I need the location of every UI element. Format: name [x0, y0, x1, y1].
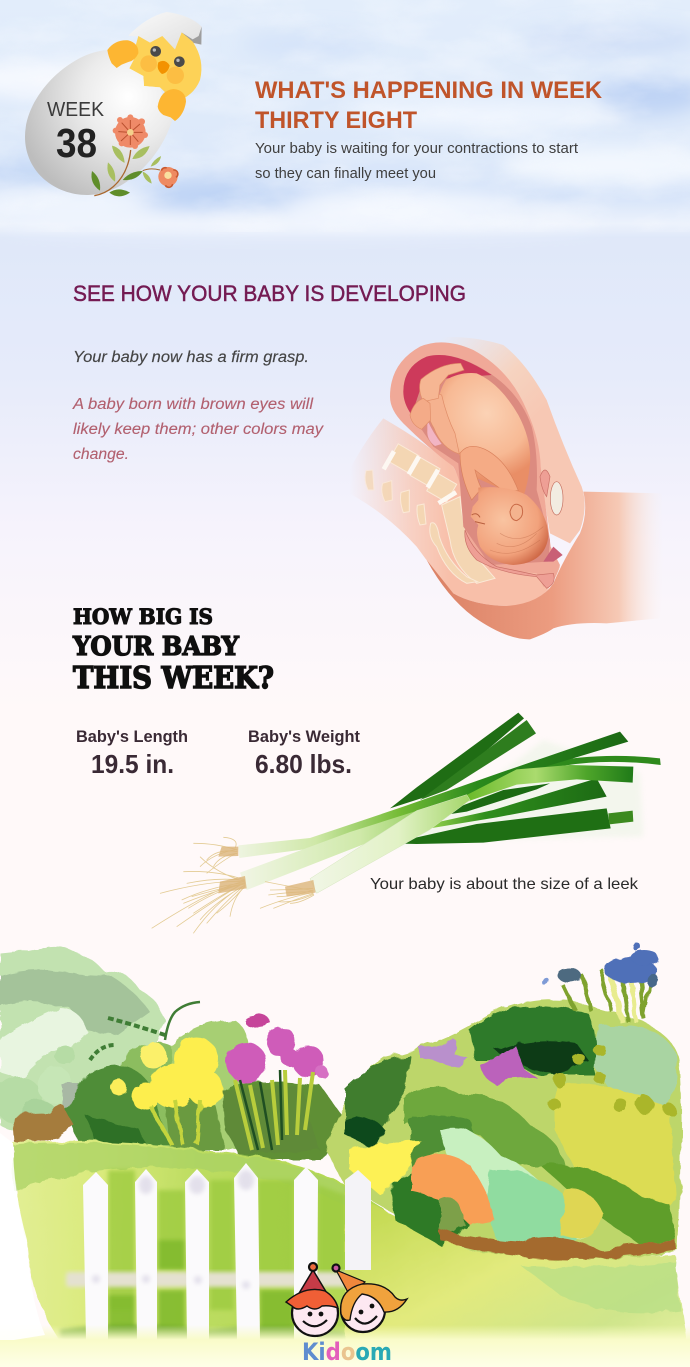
heading: how big is your baby	[72, 604, 274, 696]
uterus wall	[390, 342, 560, 587]
fetus legs and feet	[410, 363, 464, 454]
icon: chick wings	[107, 40, 186, 121]
eye colour fact: likely keep them; other colors may	[73, 421, 324, 438]
birth canal folds	[465, 470, 554, 588]
maternal back with spine	[340, 418, 560, 606]
illustration: watercolor garden	[0, 943, 690, 1367]
logo boy	[286, 1263, 338, 1336]
heading: what's happening: WHAT'S HAPPENING IN WEEK	[255, 77, 602, 104]
illustration: leek	[152, 713, 661, 933]
pink flowers	[222, 1015, 328, 1155]
leek caption: Your baby is about the size of a leek	[370, 876, 639, 893]
white left margin	[0, 1133, 45, 1340]
garden green bushes	[65, 1020, 345, 1160]
logo wordmark: Kidoom	[302, 1338, 392, 1366]
grass foot strip	[0, 1325, 690, 1367]
right picket	[345, 1170, 371, 1270]
heading: how big is your baby: YOUR BABY	[72, 632, 239, 662]
heading: what's happening: THIRTY EIGHT	[255, 107, 417, 134]
amniotic interior	[403, 355, 563, 565]
eye colour fact: A baby born with brown eyes will	[72, 396, 314, 413]
fetus arm	[460, 446, 518, 500]
stat: baby's weight: 6.80 lbs.	[255, 749, 352, 779]
heading: development: SEE HOW YOUR BABY IS DEVELOPING	[73, 281, 466, 306]
intro text: Your baby is waiting for your contractions to start	[255, 141, 578, 157]
maternal torso	[427, 492, 663, 639]
pale leek stalks	[238, 732, 633, 893]
purple flowers	[420, 1039, 538, 1084]
leek shadow	[337, 740, 643, 857]
logo girl	[332, 1264, 407, 1332]
eye colour fact: change.	[73, 446, 129, 463]
garden left tree	[0, 948, 165, 1136]
right hillside bushes	[325, 999, 682, 1259]
leek roots	[152, 837, 314, 933]
leek curved leaf	[517, 756, 661, 770]
pink flower stems	[235, 1070, 313, 1150]
fetus body	[437, 373, 530, 498]
heading: how big is your baby: THIS WEEK?	[73, 661, 274, 696]
stat: baby's length: 19.5 in.	[91, 749, 174, 779]
eye colour fact	[72, 396, 324, 463]
olive vine	[549, 1044, 676, 1116]
fence shading	[92, 1170, 254, 1289]
fetus head	[471, 487, 548, 565]
sprig	[90, 1002, 200, 1060]
right lawn wash	[520, 1262, 680, 1313]
picket fence	[83, 1163, 318, 1340]
stat: baby's weight	[248, 727, 360, 779]
illustration: fetus in womb	[340, 337, 663, 639]
dark leek stalks	[390, 713, 633, 844]
bladder	[550, 482, 563, 515]
intro text	[255, 141, 578, 182]
development fact: Your baby now has a firm grasp.	[73, 349, 309, 366]
yellow flowers	[111, 1037, 223, 1145]
fence rail	[66, 1272, 366, 1287]
logo: two kids	[286, 1263, 407, 1366]
right lawn	[345, 1190, 690, 1367]
blue flowers	[541, 943, 659, 1022]
week number: 38	[56, 120, 97, 166]
pastel gradient backdrop	[0, 230, 690, 710]
stat: baby's length: Baby's Length	[76, 727, 188, 746]
garden brown earth	[13, 1104, 73, 1143]
intro text: so they can finally meet you	[255, 166, 436, 182]
icon: chick	[129, 32, 201, 102]
belly wall	[420, 337, 585, 543]
stat: baby's length	[76, 727, 188, 779]
heading: what's happening	[255, 77, 602, 134]
egg with chick badge	[25, 12, 202, 196]
icon: shell top	[128, 12, 202, 49]
stat: baby's weight: Baby's Weight	[248, 727, 360, 746]
lawn behind fence	[13, 1141, 385, 1340]
icon: egg body	[25, 50, 172, 195]
week label: WEEK	[47, 99, 105, 121]
leek root crowns	[218, 847, 316, 897]
fence background wash	[60, 1170, 345, 1345]
heading: how big is your baby: HOW BIG IS	[73, 604, 213, 629]
icon: flower sprig	[91, 114, 178, 196]
brown soil strip	[440, 1230, 677, 1259]
watercolor sky	[0, 0, 690, 238]
